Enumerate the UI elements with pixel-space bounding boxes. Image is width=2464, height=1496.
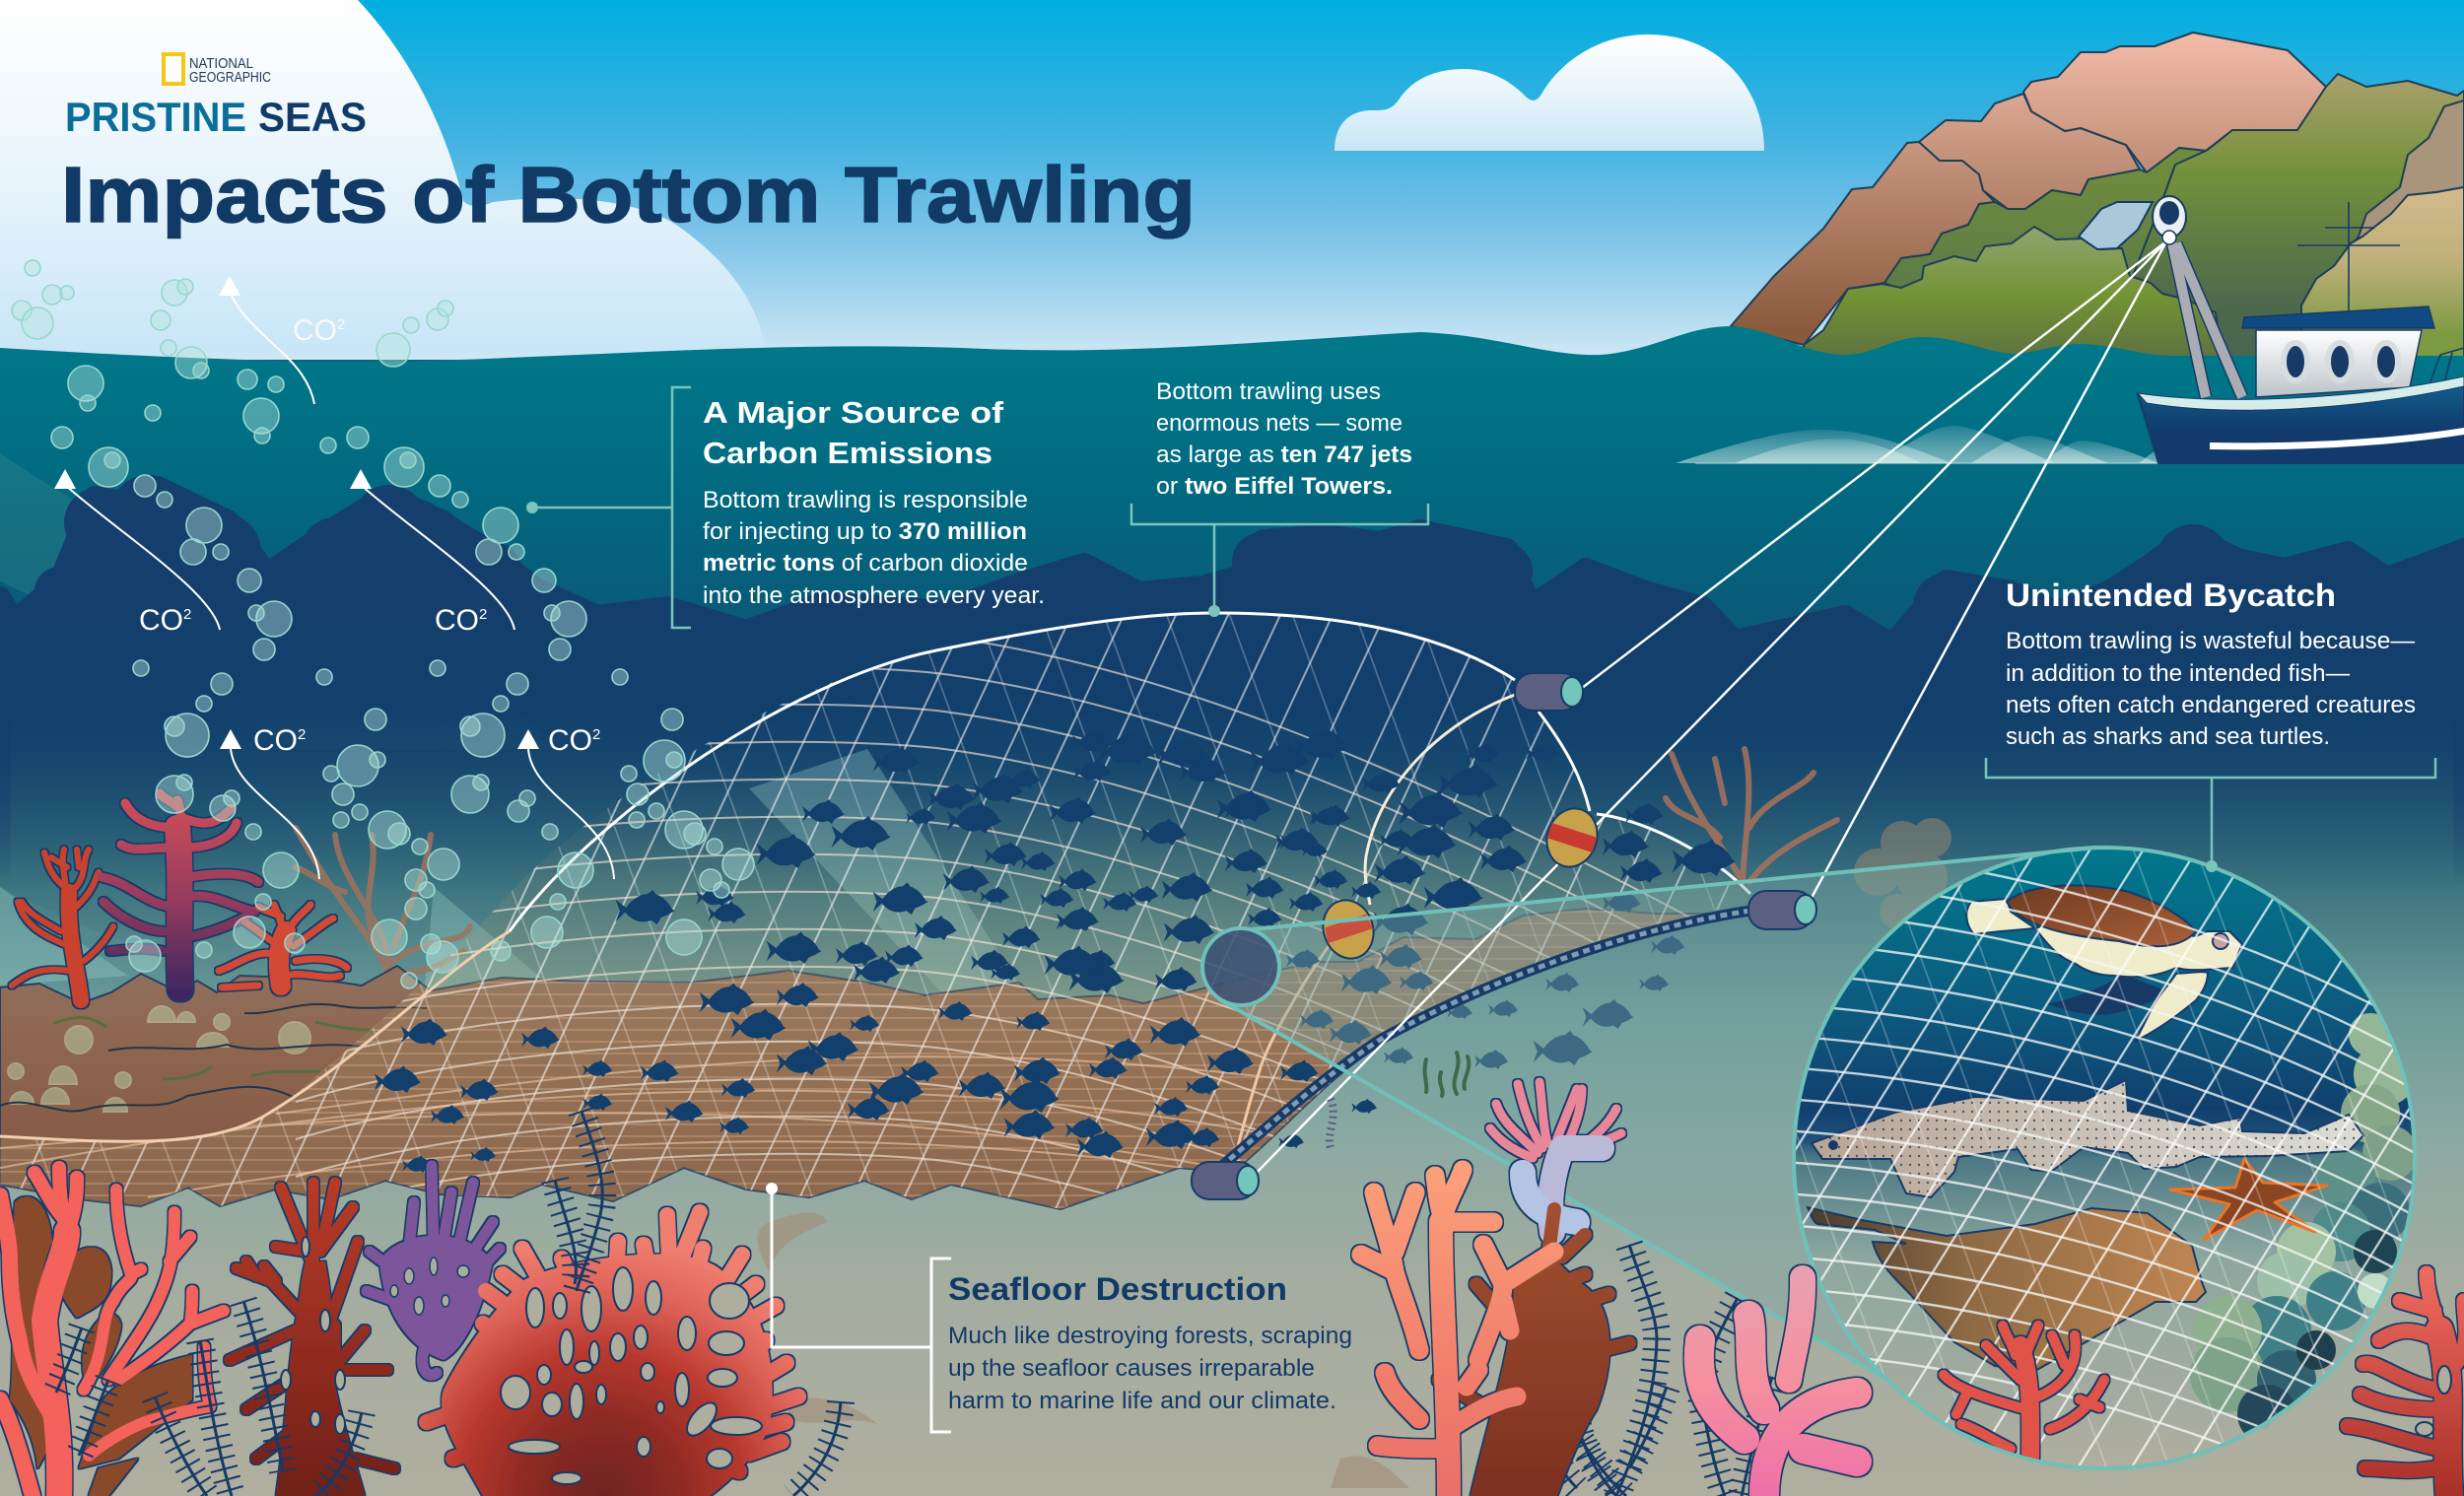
mound ground lines bbox=[0, 1004, 427, 1111]
large cloud behind title bbox=[0, 0, 766, 351]
fish school bbox=[375, 727, 1736, 1173]
big lens circle with bycatch bbox=[1792, 846, 2417, 1470]
rail bbox=[2429, 348, 2464, 386]
crane legs bbox=[2172, 243, 2242, 397]
net roll bbox=[2079, 202, 2153, 249]
top-left reef corals bbox=[12, 793, 347, 1000]
CO2 labels: 2 bbox=[298, 726, 306, 743]
CO2 labels: 2 bbox=[183, 606, 191, 623]
panel: unintended bycatch: nets often catch endangered creatures bbox=[2006, 692, 2416, 718]
sky background bbox=[0, 0, 2464, 360]
logo: Pristine Seas: PRISTINE bbox=[65, 94, 246, 140]
red coral in lens bbox=[1944, 1326, 2104, 1462]
pulley bbox=[2153, 196, 2186, 244]
hull stripe bbox=[2210, 428, 2464, 449]
pink coral bbox=[1699, 1278, 1857, 1496]
roof bbox=[2242, 306, 2434, 328]
small magnifier lens bbox=[1202, 928, 1279, 1005]
CO2 labels: 2 bbox=[479, 606, 487, 623]
bottom-left corals bbox=[0, 1166, 798, 1496]
lilac and pink top coral bbox=[1490, 1082, 1621, 1232]
body text: metric tons of carbon dioxide bbox=[703, 550, 1028, 577]
tan-orange coral bbox=[12, 850, 113, 1000]
purple coral holes bbox=[390, 1258, 469, 1315]
logo: Pristine Seas: SEAS bbox=[258, 94, 367, 140]
green coral bbox=[2190, 1013, 2418, 1444]
title: Impacts of Bottom Trawling bbox=[61, 151, 1196, 238]
chain bbox=[1223, 911, 1750, 1165]
shark bbox=[1812, 1080, 2363, 1197]
CO2 labels: CO bbox=[253, 724, 298, 757]
CO2 arrowheads bbox=[54, 276, 539, 749]
heading bbox=[703, 395, 1004, 470]
big coral holes bbox=[281, 1237, 762, 1484]
white tow cables bbox=[1248, 241, 2166, 1182]
sea bbox=[0, 326, 2464, 1496]
lens net mesh bbox=[1796, 850, 2411, 1466]
panel: net size bbox=[1131, 378, 1428, 617]
logo: National Geographic: NATIONAL bbox=[189, 55, 253, 72]
brown sponge bbox=[10, 1196, 192, 1496]
cone edge lines bbox=[1219, 848, 2096, 1378]
CO2 labels: 2 bbox=[592, 726, 600, 743]
distant reef silhouettes bbox=[0, 475, 2464, 907]
net outline bbox=[0, 931, 510, 1141]
cabin bbox=[2256, 330, 2422, 397]
panel: net size: as large as ten 747 jets bbox=[1156, 442, 1412, 468]
fishing boat bbox=[2079, 196, 2464, 463]
panel: net size: or two Eiffel Towers. bbox=[1156, 473, 1393, 500]
orange coral bbox=[1361, 1170, 1554, 1496]
bracket bbox=[532, 387, 691, 628]
mound bubbles and ground lines bbox=[8, 1006, 310, 1112]
CO2 labels bbox=[139, 314, 600, 757]
panel: carbon emissions bbox=[526, 387, 1045, 628]
CO2 labels: CO bbox=[293, 314, 337, 347]
logo: National Geographic bbox=[164, 54, 271, 86]
big salmon coral bbox=[442, 1255, 773, 1496]
panel: net size: Bottom trawling uses bbox=[1156, 378, 1381, 405]
lighter current bands bbox=[0, 453, 552, 986]
mountains bbox=[1731, 33, 2464, 357]
small cloud bbox=[1335, 34, 1764, 151]
panel: unintended bycatch: in addition to the intended fish— bbox=[2006, 660, 2350, 687]
purple coral bbox=[379, 1236, 493, 1360]
antenna bbox=[2297, 202, 2400, 315]
kelp plants bbox=[56, 1111, 1772, 1496]
mid-bottom corals bbox=[1361, 1082, 1857, 1496]
mound seaweed bbox=[54, 1017, 373, 1079]
bubbles bbox=[12, 260, 754, 988]
CO2 arrows bbox=[65, 291, 614, 879]
background fluffy coral bbox=[1854, 818, 1951, 929]
panel: seafloor destruction: harm to marine life and our climate. bbox=[948, 1388, 1336, 1414]
background tan corals bbox=[296, 749, 1837, 976]
light beams on the sand bbox=[0, 749, 1020, 997]
lens ring bbox=[1794, 848, 2415, 1468]
orange coral bbox=[219, 905, 347, 987]
dark red coral bbox=[276, 1261, 365, 1496]
magenta coral bbox=[102, 793, 258, 988]
panel: seafloor destruction bbox=[766, 1183, 1352, 1432]
net door cylinders bbox=[1192, 673, 1816, 1199]
body text: Bottom trawling is responsible bbox=[703, 487, 1028, 513]
CO2 labels: CO bbox=[139, 604, 183, 637]
panel: unintended bycatch bbox=[1986, 578, 2435, 872]
portholes bbox=[2284, 343, 2398, 380]
heading: A Major Source of bbox=[703, 395, 1004, 430]
net body with mesh bbox=[0, 615, 1748, 1209]
body text: into the atmosphere every year. bbox=[703, 582, 1045, 609]
logo: Pristine Seas bbox=[65, 94, 367, 140]
logo: National Geographic: GEOGRAPHIC bbox=[189, 69, 271, 86]
surface waves bbox=[1676, 426, 2365, 464]
panel: seafloor destruction: Seafloor Destruction bbox=[948, 1271, 1287, 1307]
salmon branching coral bbox=[0, 1168, 224, 1496]
CO2 labels: 2 bbox=[337, 316, 345, 333]
ray bbox=[1808, 1207, 2206, 1371]
panel: unintended bycatch: such as sharks and sea turtles. bbox=[2006, 723, 2330, 750]
body text bbox=[703, 487, 1045, 609]
sand smudges bbox=[757, 1213, 1409, 1488]
brown-red coral bbox=[1471, 1252, 1609, 1496]
CO2 labels: CO bbox=[435, 604, 479, 637]
deck stripe bbox=[2138, 376, 2464, 410]
hull bbox=[2138, 382, 2464, 463]
small seafloor plants bbox=[1330, 1053, 1469, 1148]
panel: unintended bycatch: Bottom trawling is wasteful because— bbox=[2006, 628, 2415, 654]
magnifier cone bbox=[1219, 848, 2415, 1429]
body text: for injecting up to 370 million bbox=[703, 518, 1027, 545]
turtle bbox=[1966, 885, 2242, 1041]
panel: net size: enormous nets — some bbox=[1156, 410, 1403, 437]
panel: unintended bycatch: Unintended Bycatch bbox=[2006, 578, 2336, 613]
bottom-right coral bbox=[2348, 1273, 2464, 1496]
heading: Carbon Emissions bbox=[703, 436, 992, 470]
floats bbox=[1316, 802, 1605, 965]
panel: seafloor destruction: Much like destroying forests, scraping bbox=[948, 1323, 1352, 1349]
seafloor mound and net floor bbox=[0, 909, 1750, 1209]
CO2 labels: CO bbox=[548, 724, 592, 757]
panel: seafloor destruction: up the seafloor causes irreparable bbox=[948, 1355, 1315, 1382]
trawl net bbox=[0, 611, 1751, 1209]
starfish bbox=[2170, 1159, 2327, 1240]
